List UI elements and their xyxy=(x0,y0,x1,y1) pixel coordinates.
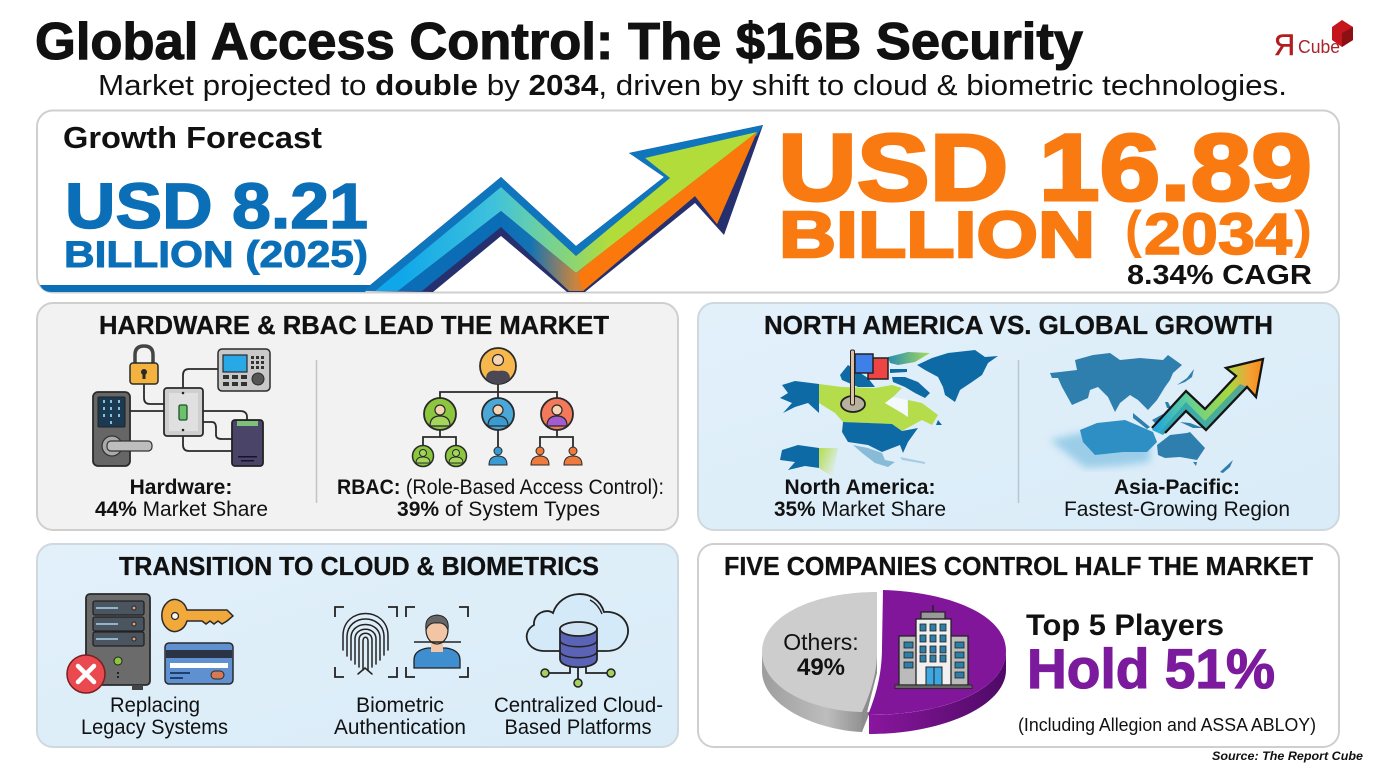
value: 2034 market size: 2034 xyxy=(1144,202,1292,267)
text: North America share xyxy=(774,476,946,521)
value: 2034 market size: USD 16.89 xyxy=(778,115,1312,221)
panel: cloud and biometrics transition xyxy=(37,544,678,747)
text: cloud platforms xyxy=(494,694,663,739)
heading: FIVE COMPANIES CONTROL HALF THE MARKET xyxy=(724,551,1313,581)
text: legacy systems: Replacing xyxy=(110,694,200,717)
heading: TRANSITION TO CLOUD & BIOMETRICS xyxy=(119,551,599,581)
map: North America xyxy=(780,350,998,477)
value: 2025 market size: BILLION (2025) xyxy=(64,234,368,275)
text: others share xyxy=(783,629,859,681)
icon: role hierarchy xyxy=(412,348,582,466)
value: 2025 market size: USD 8.21 xyxy=(65,170,368,242)
text: Asia-Pacific: Fastest-Growing Region xyxy=(1064,498,1290,521)
source note: Source: The Report Cube xyxy=(1212,749,1363,763)
value: CAGR: 8.34% CAGR xyxy=(1127,259,1312,290)
heading: growth forecast: Growth Forecast xyxy=(63,120,322,155)
chart: market share pie xyxy=(762,590,1006,734)
text: RBAC share xyxy=(337,476,664,521)
arrow: growth trend xyxy=(363,125,763,292)
text: legacy systems: Legacy Systems xyxy=(81,716,228,739)
text: North America share: North America: xyxy=(785,476,935,499)
text: hardware share xyxy=(95,476,268,521)
icon: access card xyxy=(165,643,233,684)
panel: hardware and RBAC xyxy=(37,303,678,530)
icon: access control hardware xyxy=(93,346,270,466)
panel: growth forecast xyxy=(37,110,1339,292)
icon: office building xyxy=(895,605,972,688)
text: Asia-Pacific: Asia-Pacific: xyxy=(1114,476,1240,499)
text: hardware share: Hardware: xyxy=(130,476,232,499)
text: top 5 players: (Including Allegion and ASSA ABLOY) xyxy=(1018,715,1316,735)
icon: biometrics xyxy=(335,607,468,677)
value: 2025 market size xyxy=(64,170,368,275)
subtitle: Market projected to double by 2034, driven by shift to cloud & biometric technologies. xyxy=(98,70,1287,102)
text: cloud platforms: Based Platforms xyxy=(504,716,652,739)
text: legacy systems xyxy=(81,694,228,739)
text: Asia-Pacific xyxy=(1064,476,1290,521)
value: 2034 market size: ) xyxy=(1294,201,1312,259)
icon: face scan xyxy=(414,615,461,668)
logo: RCube xyxy=(1274,20,1353,62)
icon: flag xyxy=(841,350,888,412)
text: RBAC share: RBAC: (Role-Based Access Control): xyxy=(337,476,664,499)
heading: NORTH AMERICA VS. GLOBAL GROWTH xyxy=(764,310,1273,340)
text: others share: 49% xyxy=(797,654,845,681)
text: cloud platforms: Centralized Cloud- xyxy=(494,694,663,717)
value: 2034 market size: BILLION xyxy=(779,198,1095,271)
icon: growth arrow xyxy=(1152,359,1263,435)
text: biometric authentication: Authentication xyxy=(334,716,466,739)
baseline band xyxy=(40,285,372,292)
logo: RCube: Cube xyxy=(1298,37,1340,57)
map: Asia-Pacific with growth arrow xyxy=(1050,353,1263,473)
text: top 5 players xyxy=(1018,609,1316,735)
value: 2034 market size xyxy=(778,115,1312,271)
icon: key xyxy=(162,600,233,632)
icon: fingerprint xyxy=(343,614,388,674)
heading: HARDWARE & RBAC LEAD THE MARKET xyxy=(99,310,609,340)
title: Global Access Control: The $16B Security xyxy=(35,13,1083,71)
value: 2034 market size: ( xyxy=(1125,201,1143,259)
text: biometric authentication: Biometric xyxy=(356,694,444,717)
text: biometric authentication xyxy=(334,694,466,739)
panel: market concentration xyxy=(698,544,1339,747)
text: hardware share: 44% Market Share xyxy=(95,498,268,521)
text: others share: Others: xyxy=(783,629,859,655)
text: North America share: 35% Market Share xyxy=(774,498,946,521)
icon: cloud database xyxy=(527,594,628,687)
icon: legacy systems xyxy=(67,594,233,693)
panel: regional growth xyxy=(698,303,1339,530)
logo: RCube: Я xyxy=(1274,29,1295,62)
text: top 5 players: Hold 51% xyxy=(1027,637,1275,700)
text: top 5 players: Top 5 Players xyxy=(1026,609,1224,642)
text: RBAC share: 39% of System Types xyxy=(397,498,600,521)
